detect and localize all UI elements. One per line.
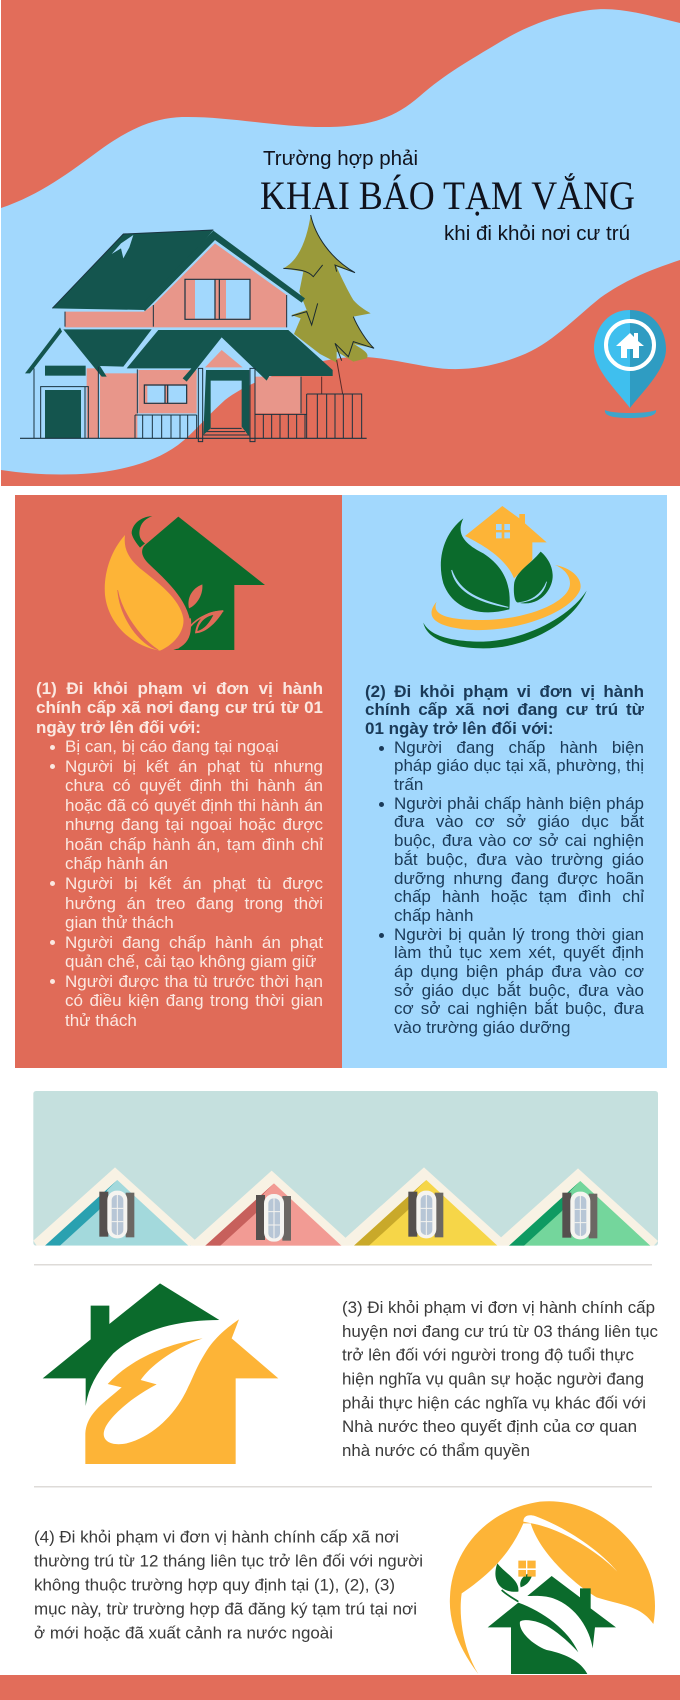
text: case 2: chính cấp xã nơi đang cư trú từ [365,700,644,719]
text: case 4: ở mới hoặc đã xuất cảnh ra nước ngoài [34,1624,333,1642]
roof: teal [33,1167,195,1246]
icon: logo case 4 [450,1501,655,1674]
title [260,148,635,245]
icon: logo case 1 [105,516,265,651]
text: case 1: gian thử thách [65,913,174,932]
text: case 1: chính cấp xã nơi đang cư trú từ 01 [36,698,323,717]
roof: pink [190,1171,352,1249]
text: case 2 [365,682,644,1037]
text: case 2: Người phải chấp hành biện pháp [394,794,644,813]
text: case 3 [342,1299,658,1460]
text: case 4: không thuộc trường hợp quy định tại (1), (2), (3) [34,1576,395,1594]
text: case 2: cơ sở cai nghiện bắt buộc, đưa [394,999,644,1018]
text: case 1: quản chế, cải tạo không giam giữ [65,952,316,971]
text: case 4: mục này, trừ trường hợp đã đăng ký tạm trú tại nơi [34,1600,417,1618]
icon: logo case 2 [423,506,587,648]
text: case 2: dưỡng nhưng đang được hoãn [394,869,644,888]
text: case 2: 01 ngày trở lên đối với: [365,719,554,738]
text: case 2: (2) Đi khỏi phạm vi đơn vị hành [365,682,644,700]
text: case 1: thử thách [65,1011,137,1030]
text: case 1: Người được tha tù trước thời hạn [65,972,323,991]
text: case 1: Người đang chấp hành án phạt [65,933,323,952]
icon: logo case 3 [43,1283,278,1464]
text: case 2: áp dụng biện pháp đưa vào cơ [394,962,644,981]
text: case 2: Người đang chấp hành biện [394,738,644,757]
text: case 1: ngày trở lên đối với: [36,718,201,737]
text: case 1 [36,678,323,1030]
text: case 2: làm thủ tục xem xét, quyết định [394,943,644,962]
text: case 1: hoặc đã có quyết định thi hành án [65,796,323,815]
roof: yellow [342,1167,504,1246]
hero background [1,0,680,486]
text: case 2: trấn [394,775,423,794]
text: case 3: hiện nghĩa vụ quân sự hoặc người đang [342,1371,644,1389]
text: case 1: Bị can, bị cáo đang tại ngoại [65,737,279,756]
text: case 2: pháp giáo dục tại xã, phường, thị [394,756,644,775]
text: case 3: Nhà nước theo quyết định của cơ quan [342,1418,637,1436]
roof: green [496,1168,658,1247]
text: case 1: có điều kiện đang trong thời gian [65,991,323,1010]
text: case 1: (1) Đi khỏi phạm vi đơn vị hành [36,678,323,698]
text: case 2: buộc, đưa vào cơ sở cai nghiện [394,831,644,850]
text: case 2: chấp hành hoặc tạm đình chỉ [394,887,644,906]
text: case 1: chấp hành án [65,854,168,873]
house outlines [20,230,367,442]
text: case 4: thường trú từ 12 tháng liên tục trở lên đối với người [34,1553,423,1571]
text: case 4: (4) Đi khỏi phạm vi đơn vị hành chính cấp xã nơi [34,1529,399,1547]
text: case 2: chấp hành [394,906,473,925]
panel: case 2 background [342,495,667,1068]
illustration: house and tree [20,215,374,442]
footer bar [0,1675,680,1700]
walls [65,243,301,438]
text: case 1: hoãn chấp hành án, tạm đình chỉ [65,835,323,854]
text: case 1: nhưng đang tại ngoại hoặc được [65,815,323,834]
text: case 1: Người bị kết án phạt tù nhưng [65,757,323,776]
text: case 2: đưa vào cơ sở giáo dục bắt [394,812,644,831]
text: case 1: chưa có quyết định thi hành án [65,776,323,795]
icon: location pin [594,310,666,418]
photo: colourful roofs [30,1091,680,1256]
panel: case 1 background [15,495,342,1068]
text: case 3: trở lên đối với người trong độ tuổi thực [342,1347,634,1365]
tree [283,215,374,394]
roofs [25,230,333,438]
text: case 3: phải thực hiện các nghĩa vụ khác đối với [342,1394,646,1412]
lower window [144,385,187,403]
text: case 1: hưởng án treo đang trong thời [65,894,323,913]
upper window [185,279,250,319]
text: case 4 [34,1529,423,1642]
title: khi đi khỏi nơi cư trú [444,223,630,245]
text: case 3: (3) Đi khỏi phạm vi đơn vị hành chính cấp [342,1299,655,1317]
text: case 1: Người bị kết án phạt tù được [65,874,323,893]
text: case 3: huyện nơi đang cư trú từ 03 tháng liên tục [342,1323,658,1341]
title: Trường hợp phải [263,148,418,170]
text: case 2: sở giáo dục bắt buộc, đưa vào [394,981,644,1000]
text: case 2: Người bị quản lý trong thời gian [394,925,644,944]
text: case 2: bắt buộc, đưa vào trường giáo [394,850,644,869]
title: KHAI BÁO TẠM VẮNG [260,173,635,218]
text: case 2: vào trường giáo dưỡng [394,1018,570,1037]
text: case 3: nhà nước có thẩm quyền [342,1442,530,1460]
